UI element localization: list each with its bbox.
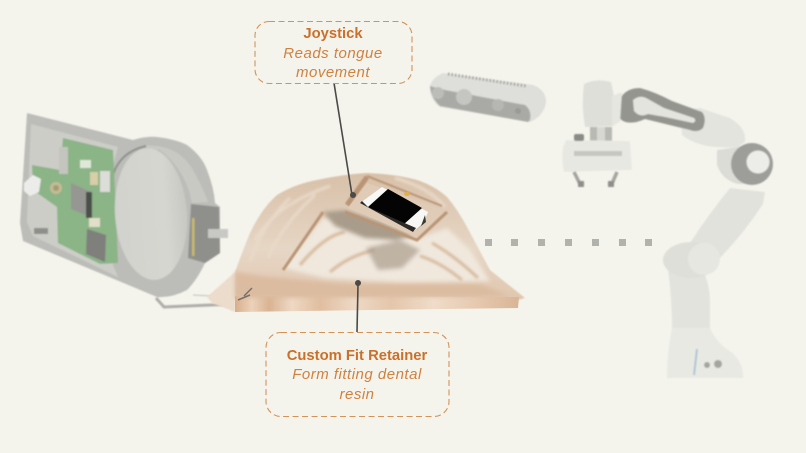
wrist [583,80,615,127]
elbow side lobe [717,146,750,184]
joystick module [360,187,428,232]
housing inner floor [27,124,118,277]
dotted connector [485,239,652,246]
arm base [667,328,744,378]
lower gum tone [235,272,510,298]
elbow joint [663,242,719,278]
icon: electronics housing with battery [20,113,250,307]
gripper fingers [574,172,617,186]
dome streaks [250,178,445,262]
callout text: joystick: Reads tongue [283,45,383,62]
circuit board [32,138,118,264]
callout heading: retainer: Custom Fit Retainer [287,348,428,364]
flange [590,127,612,148]
callout text: retainer: Form fitting dental [292,366,422,383]
callout: joystick [255,22,412,84]
retainer inner palate [283,218,490,282]
callout text: retainer: resin [339,386,375,403]
shoulder dark joint [731,143,773,185]
board components [24,147,110,262]
ring shadow edge [113,146,146,175]
callout text: joystick: movement [296,64,370,81]
lenses [432,87,521,114]
battery [110,146,192,282]
palate streaks [300,232,478,280]
leader line: joystick [334,83,356,198]
leader line: retainer [355,280,361,332]
joystick socket [348,183,442,237]
retainer rim [283,176,447,270]
light arm inlay [633,97,695,123]
connector [188,204,220,263]
arm column [668,270,710,328]
camera face [430,86,530,122]
dark arm link [617,88,705,131]
callout: custom fit retainer [266,332,449,416]
palate shadow [323,210,420,270]
gripper [562,140,632,172]
arm forearm [690,188,765,258]
ring inner wall [140,146,208,203]
upper arm [680,108,745,148]
base ports [704,360,722,368]
camera body [430,73,546,122]
translucent left wing [207,272,235,312]
icon: robot arm [562,80,773,378]
icon: depth camera [430,73,546,122]
housing shell [20,113,220,297]
base status strip [693,349,698,375]
retainer dome [235,173,525,300]
vent slots [448,74,526,86]
retainer base band [235,296,519,312]
wire tip [238,288,252,300]
callout heading: joystick: Joystick [303,26,363,42]
wire [156,298,234,307]
icon: custom fit retainer [207,173,525,312]
